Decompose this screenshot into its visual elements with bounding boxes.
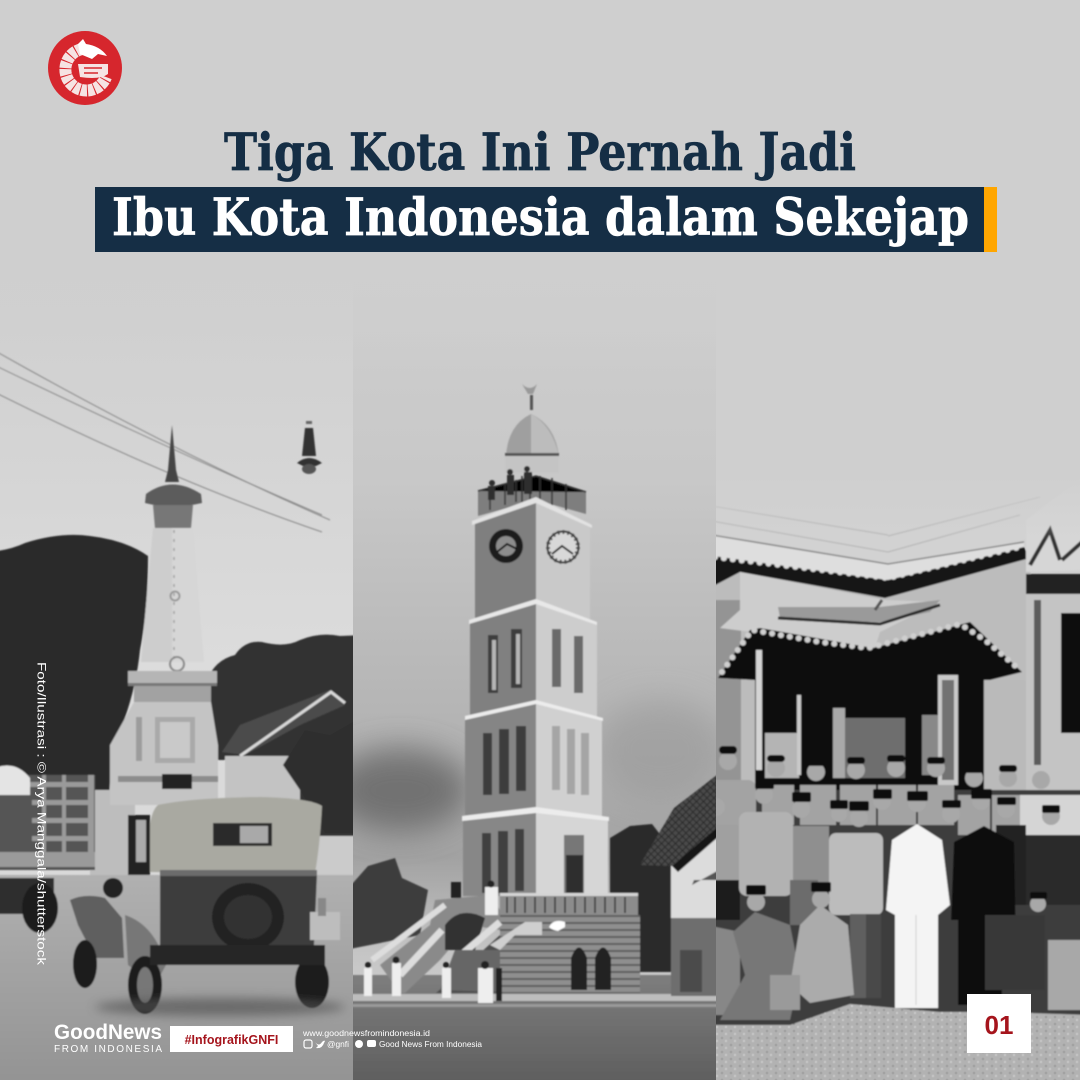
white suit man — [886, 824, 950, 1008]
truck on left — [0, 878, 54, 914]
crowd shadow backdrop — [706, 790, 1080, 1025]
gate and fence on left — [0, 775, 95, 870]
finial — [530, 395, 533, 410]
website and social links: @gnfi — [327, 1040, 349, 1049]
dark shadow below eave — [706, 547, 1030, 600]
dark clouds — [330, 748, 470, 832]
light uniform man — [829, 833, 883, 998]
title line two: Ibu Kota Indonesia dalam Sekejap — [112, 188, 969, 248]
fade at panel top — [716, 470, 1080, 540]
title line one: Tiga Kota Ini Pernah Jadi — [224, 123, 856, 183]
hashtag badge: #InfografikGNFI — [185, 1033, 278, 1047]
front row seated men — [706, 905, 1080, 1020]
people at tower base — [364, 880, 502, 1003]
ground and road — [345, 975, 725, 1080]
trees behind monument — [0, 535, 148, 815]
hashtag badge — [170, 1026, 293, 1052]
awning — [720, 572, 940, 648]
icon: twitter — [315, 1041, 325, 1048]
vintage car — [70, 797, 340, 1014]
title accent — [984, 187, 997, 252]
right clock face — [548, 532, 578, 562]
street lamp — [297, 421, 322, 474]
icon: youtube — [367, 1040, 376, 1047]
dark porch — [718, 622, 1022, 790]
trees behind house — [610, 824, 680, 972]
title highlight bar — [95, 187, 984, 252]
third section — [465, 702, 536, 817]
wall and pavement — [316, 834, 353, 874]
balcony railing — [477, 490, 587, 516]
bodies middle row — [706, 812, 1080, 925]
second section — [470, 601, 536, 718]
icon: instagram — [304, 1040, 312, 1048]
wall of house — [716, 558, 1032, 784]
fade at panel top — [353, 250, 716, 370]
scalloped awning edge — [722, 624, 1020, 672]
car shadow on road — [95, 998, 345, 1016]
GoodNews logotype: FROM INDONESIA — [54, 1044, 162, 1055]
windows and doors — [756, 650, 1036, 790]
brick base — [500, 915, 640, 993]
logo — [48, 31, 122, 105]
bodies back row — [706, 780, 1026, 840]
fade to background at top — [0, 250, 353, 370]
website and social links — [302, 1029, 483, 1049]
dome — [506, 414, 559, 456]
photo credit: Foto/Ilustrasi : © Arya Manggala/shutterstock — [34, 662, 48, 966]
house roof — [222, 690, 345, 755]
GoodNews logotype — [54, 1021, 162, 1055]
panel: group photo at Bireuen house — [716, 514, 1080, 1080]
top section — [475, 500, 536, 621]
stairs — [380, 895, 500, 993]
page number badge — [967, 994, 1031, 1053]
dark suit man — [951, 826, 1016, 1005]
gravel ground — [706, 985, 1080, 1080]
website and social links: Good News From Indonesia — [379, 1040, 483, 1049]
eaves under roof — [706, 534, 1024, 582]
power lines — [0, 348, 330, 532]
trees on left — [345, 858, 428, 950]
page number badge: 01 — [985, 1010, 1013, 1040]
white hand mark — [549, 921, 565, 931]
left clock face — [489, 529, 523, 563]
title — [95, 123, 997, 252]
clock tower — [372, 384, 640, 993]
panel: Bukittinggi clock tower photo — [353, 384, 716, 1080]
panel: Yogyakarta Tugu monument photo — [0, 352, 353, 1080]
main roof — [706, 480, 1080, 568]
GoodNews logotype: GoodNews — [54, 1021, 162, 1044]
Tugu monument — [110, 425, 218, 805]
faces and caps of men — [707, 746, 1060, 912]
icon: facebook — [355, 1040, 363, 1048]
fourth section — [463, 812, 536, 896]
house on right — [641, 774, 716, 997]
website and social links: www.goodnewsfromindonesia.id — [302, 1029, 430, 1038]
trees on right — [210, 634, 353, 837]
right pillar, gable and dark window — [1026, 472, 1080, 804]
